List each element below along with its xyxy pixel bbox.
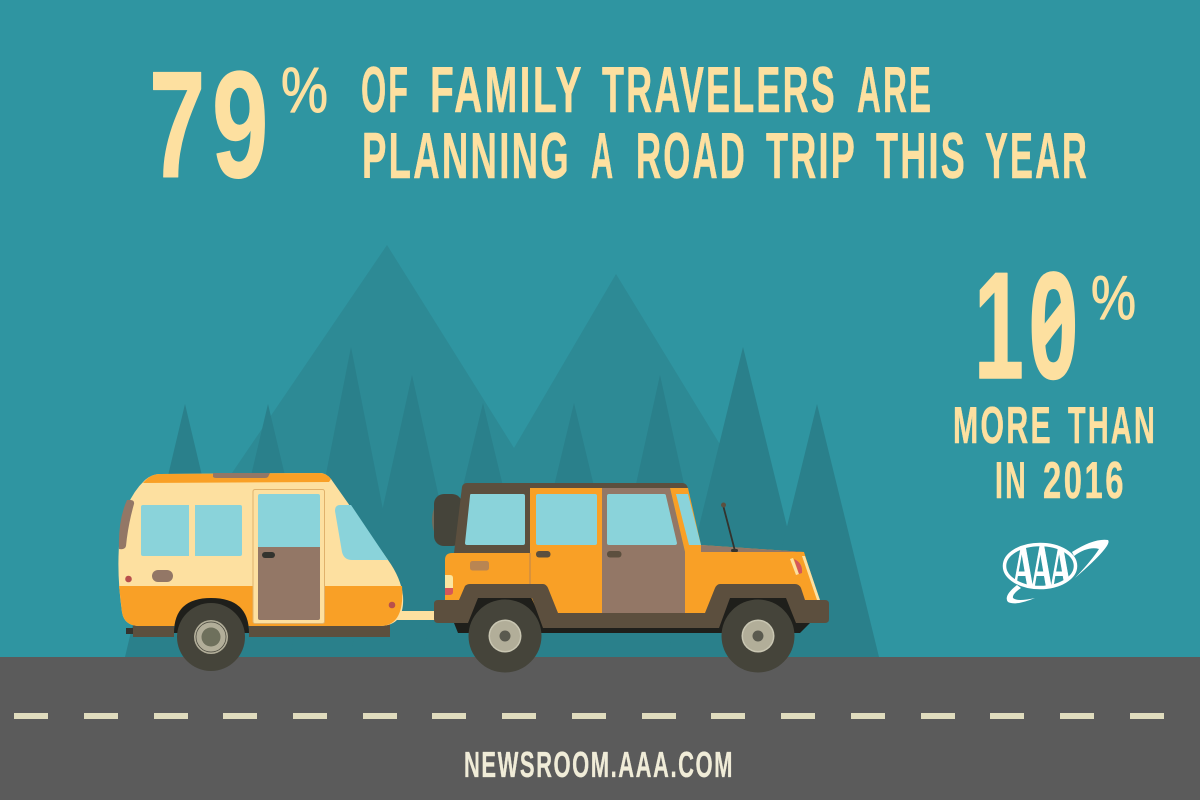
trailer top stripe	[143, 473, 331, 483]
hood and front body	[670, 488, 820, 622]
statistic: 10% more than in 2016	[953, 241, 1157, 510]
orange jeep	[432, 483, 829, 672]
jeep windows	[465, 494, 701, 545]
headline text: PLANNING	[362, 119, 571, 192]
undercarriage	[454, 595, 810, 633]
middle door	[530, 488, 602, 615]
headline text: OF	[361, 53, 410, 126]
fenders and bumpers	[434, 584, 829, 628]
AAA logo	[1002, 540, 1109, 604]
storage hatch and lights	[125, 570, 395, 608]
side windows	[141, 505, 242, 556]
front window	[335, 505, 388, 560]
rear stripe	[119, 500, 134, 549]
jeep rear wheel	[468, 600, 542, 672]
rear cab and roof	[454, 483, 688, 553]
AAA logo: AAA	[1012, 532, 1072, 605]
trailer bottom stripe	[119, 586, 402, 626]
background pine trees	[125, 347, 879, 657]
chassis	[126, 622, 390, 637]
headline text: TRAVELERS	[602, 53, 837, 126]
camper trailer	[118, 473, 437, 671]
headline text: YEAR	[985, 119, 1089, 192]
antenna	[721, 502, 738, 552]
lane dashes	[14, 713, 1164, 719]
tail light	[445, 575, 453, 595]
headline text	[361, 53, 1089, 192]
roof vent	[213, 473, 270, 478]
trailer wheel	[174, 598, 249, 671]
tow hitch	[397, 611, 437, 620]
headline text: TRIP	[766, 119, 857, 192]
statistic: 10% more than in 2016: IN	[995, 452, 1028, 510]
statistic: 10% more than in 2016: %	[1091, 264, 1136, 333]
headline statistic: 79%: %	[281, 54, 328, 126]
statistic: 10% more than in 2016: 10	[974, 241, 1083, 411]
door seams and handles	[530, 551, 622, 613]
headline statistic: 79%: 79	[149, 40, 275, 210]
headline text: FAMILY	[430, 53, 584, 126]
background mountains	[200, 245, 760, 657]
rear body	[445, 553, 530, 615]
front door	[602, 488, 685, 615]
headline text: THIS	[876, 119, 967, 192]
jeep front wheel	[722, 600, 794, 672]
headline text: ROAD	[636, 119, 747, 192]
headlight and trim	[790, 556, 820, 600]
spare tire	[432, 494, 462, 546]
statistic: 10% more than in 2016: 2016	[1043, 452, 1126, 510]
headline text: ARE	[857, 53, 933, 126]
trailer body	[118, 473, 403, 626]
footer url: NEWSROOM.AAA.COM	[464, 744, 734, 785]
door	[253, 490, 324, 624]
headline text: A	[591, 119, 615, 192]
statistic: 10% more than in 2016: MORE	[953, 397, 1053, 455]
road	[0, 657, 1200, 800]
fuel door	[470, 561, 489, 570]
